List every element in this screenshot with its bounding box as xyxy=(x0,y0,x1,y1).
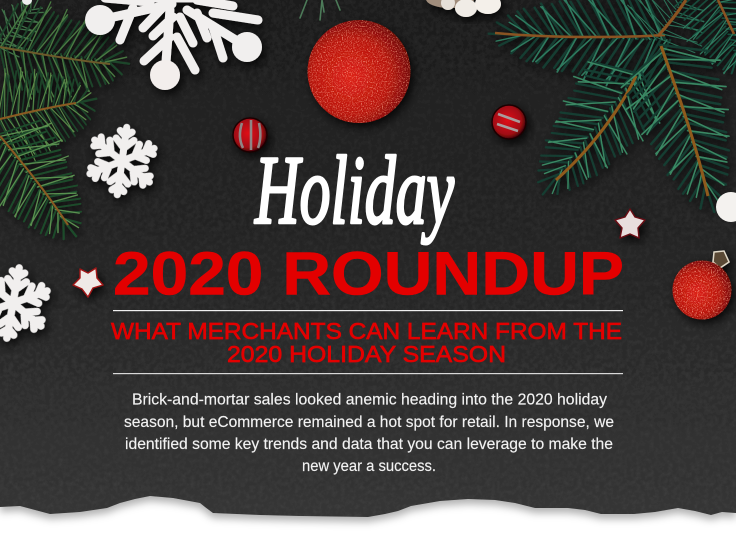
large red glitter bauble xyxy=(305,18,413,126)
small red glitter bauble with cap xyxy=(670,251,734,322)
top centre pine tip xyxy=(300,0,340,20)
intro paragraph: identified some key trends and data that you can leverage to make the xyxy=(125,436,613,453)
subtitle with rules: WHAT MERCHANTS CAN LEARN FROM THE xyxy=(111,318,622,344)
star ornament left xyxy=(73,268,103,297)
small white piece at top left xyxy=(22,0,32,5)
subtitle with rules xyxy=(111,310,623,374)
left pine branches xyxy=(0,0,135,264)
star ornament right xyxy=(615,209,645,238)
intro paragraph: new year a success. xyxy=(302,458,436,475)
left snowflake xyxy=(0,262,50,344)
striped bead right xyxy=(492,105,526,139)
white ball right edge xyxy=(716,192,736,222)
subtitle with rules: 2020 HOLIDAY SEASON xyxy=(227,341,506,367)
main title: 2020 ROUNDUP xyxy=(113,240,624,308)
striped bead left xyxy=(233,118,267,152)
pinecone at top xyxy=(426,0,501,17)
intro paragraph: Brick-and-mortar sales looked anemic heading into the 2020 holiday xyxy=(132,392,607,408)
large snowflake xyxy=(85,0,262,90)
intro paragraph xyxy=(124,392,614,475)
intro paragraph: season, but eCommerce remained a hot spot for retail. In response, we xyxy=(124,414,614,431)
small snowflake xyxy=(88,123,156,199)
script heading: Holiday xyxy=(254,137,455,244)
right pine branches xyxy=(487,0,736,226)
